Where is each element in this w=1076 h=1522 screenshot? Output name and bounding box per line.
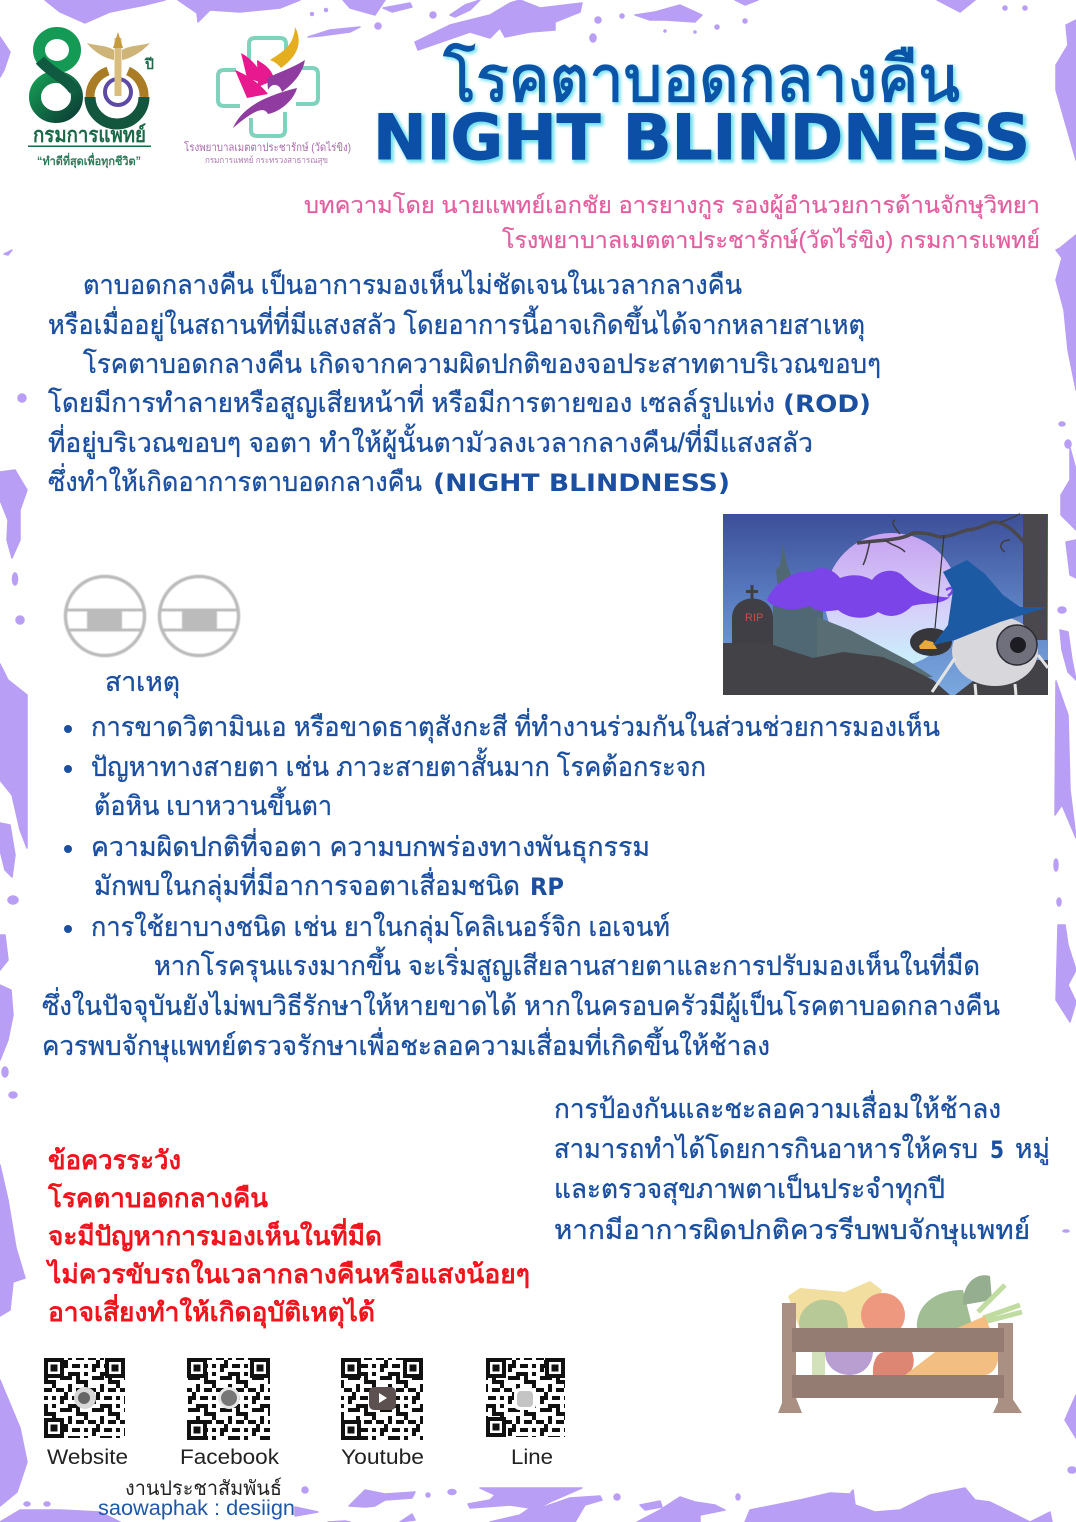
intro text block: ที่อยู่บริเวณขอบๆ จอตา ทำให้ผู้นั้นตามัวลงเวลากลางคืน/ที่มีแสงสลัว [48,423,813,459]
illustration: vegetable crate [778,1275,1022,1413]
icon: closed eyes [66,576,238,656]
qr labels: Facebook [180,1446,280,1469]
author credit: บทความโดย นายแพทย์เอกชัย อารยางกูร รองผู้อำนวยการด้านจักษุวิทยา [304,192,1040,219]
logo: Department of Medical Services 80 years: ปี [144,56,154,72]
title: Thai heading: โรคตาบอดกลางคืน [443,43,960,115]
illustration: eyeball witch under moon: RIP [745,612,763,624]
causes bullet list: ต้อหิน เบาหวานขึ้นตา [94,786,332,821]
intro text block: โรคตาบอดกลางคืน เกิดจากความผิดปกติของจอประสาทตาบริเวณขอบๆ [83,349,881,379]
purple cloud [767,568,950,618]
prevention text block [554,1090,1050,1247]
logo: Metta Pracharak hospital [184,27,351,166]
prevention text block: 5 [990,1136,1004,1164]
qr code: facebook [187,1358,270,1440]
footer credit: saowaphak : desiign [98,1497,295,1520]
severity paragraph: หากโรครุนแรงมากขึ้น จะเริ่มสูญเสียลานสายตาและการปรับมองเห็นในที่มืด [154,946,980,983]
logo: Metta Pracharak hospital: โรงพยาบาลเมตตาประชารักษ์ (วัดไร่ขิง) [184,140,351,154]
severity paragraph: ซึ่งในปัจจุบันยังไม่พบวิธีรักษาให้หายขาดได้ หากในครอบครัวมีผู้เป็นโรคตาบอดกลางคืน [42,987,1000,1023]
intro text block: โดยมีการทำลายหรือสูญเสียหน้าที่ หรือมีการตายของ เซลล์รูปแท่ง [48,384,775,419]
warning text block [45,1145,530,1329]
castle [773,542,823,660]
author credit [304,192,1040,253]
qr code: website [44,1358,125,1438]
causes bullet list: มักพบในกลุ่มที่มีอาการจอตาเสื่อมชนิด [94,867,520,903]
witch hat [933,560,1048,645]
warning text block: อาจเสี่ยงทำให้เกิดอุบัติเหตุได้ [48,1293,375,1329]
warning text block: ไม่ควรขับรถในเวลากลางคืนหรือแสงน้อยๆ [45,1258,530,1289]
warning text block: โรคตาบอดกลางคืน [47,1182,268,1213]
gravestone [732,598,773,645]
footer credit: งานประชาสัมพันธ์ [125,1477,282,1500]
severity paragraph [42,946,1000,1063]
eyeball legs [932,655,1048,695]
qr labels: Website [47,1446,128,1469]
causes bullet list: RP [530,873,564,901]
prevention text block: และตรวจสุขภาพตาเป็นประจำทุกปี [554,1171,945,1206]
prevention text block: หมู่ [1015,1134,1050,1165]
pumpkin [910,628,952,656]
tree and branch [1023,514,1047,640]
intro text block: (ROD) [783,390,871,418]
foreground hills [723,643,950,695]
prevention text block: หากมีอาการผิดปกติควรรีบพบจักษุแพทย์ [554,1214,1030,1247]
intro text block: (NIGHT BLINDNESS) [433,469,730,497]
causes bullet list: ความผิดปกติที่จอตา ความบกพร่องทางพันธุกรรม [91,828,650,864]
qr labels [47,1446,553,1469]
title [373,43,1032,176]
author credit: โรงพยาบาลเมตตาประชารักษ์(วัดไร่ขิง) กรมการแพทย์ [502,227,1040,253]
causes bullet list: ปัญหาทางสายตา เช่น ภาวะสายตาสั้นมาก โรคต้อกระจก [91,747,706,782]
prevention text block: การป้องกันและชะลอความเสื่อมให้ช้าลง [554,1090,1001,1124]
qr labels: Line [511,1446,553,1469]
qr code: youtube [341,1358,423,1440]
qr labels: Youtube [341,1446,424,1469]
title: English heading: NIGHT BLINDNESS [373,101,1030,174]
prevention text block: สามารถทำได้โดยการกินอาหารให้ครบ [554,1133,978,1164]
title: Thai heading: โรคตาบอดกลางคืน [445,45,962,117]
logo: Department of Medical Services 80 years: กรมการแพทย์ [33,123,146,147]
title: English heading: NIGHT BLINDNESS [375,103,1032,176]
qr code: line [486,1358,565,1437]
causes bullet list: การใช้ยาบางชนิด เช่น ยาในกลุ่มโคลิเนอร์จิก เอเจนท์ [91,911,670,944]
footer credit [98,1477,295,1520]
intro text block: หรือเมื่ออยู่ในสถานที่ที่มีแสงสลัว โดยอาการนี้อาจเกิดขึ้นได้จากหลายสาเหตุ [48,305,865,342]
intro text block: ซึ่งทำให้เกิดอาการตาบอดกลางคืน [48,463,422,497]
illustration: eyeball witch under moon [723,514,1048,695]
moon [825,533,959,667]
warning text block: จะมีปัญหาการมองเห็นในที่มืด [48,1217,382,1252]
warning text block: ข้อควรระวัง [48,1145,181,1175]
heading: causes: สาเหตุ [105,667,180,699]
logo: Metta Pracharak hospital: กรมการแพทย์ กระทรวงสาธารณสุข [205,154,328,166]
causes bullet list: การขาดวิตามินเอ หรือขาดธาตุสังกะสี ที่ทำงานร่วมกันในส่วนช่วยการมองเห็น [91,708,940,744]
eyeball [952,616,1038,686]
intro text block: ตาบอดกลางคืน เป็นอาการมองเห็นไม่ชัดเจนในเวลากลางคืน [83,267,742,300]
causes bullet list [64,708,940,944]
logo: Department of Medical Services 80 years: “ทำดีที่สุดเพื่อทุกชีวิต” [37,152,141,169]
logo: Department of Medical Services 80 years [28,32,154,169]
intro text block [48,267,881,497]
severity paragraph: ควรพบจักษุแพทย์ตรวจรักษาเพื่อชะลอความเสื่อมที่เกิดขึ้นให้ช้าลง [42,1026,770,1063]
